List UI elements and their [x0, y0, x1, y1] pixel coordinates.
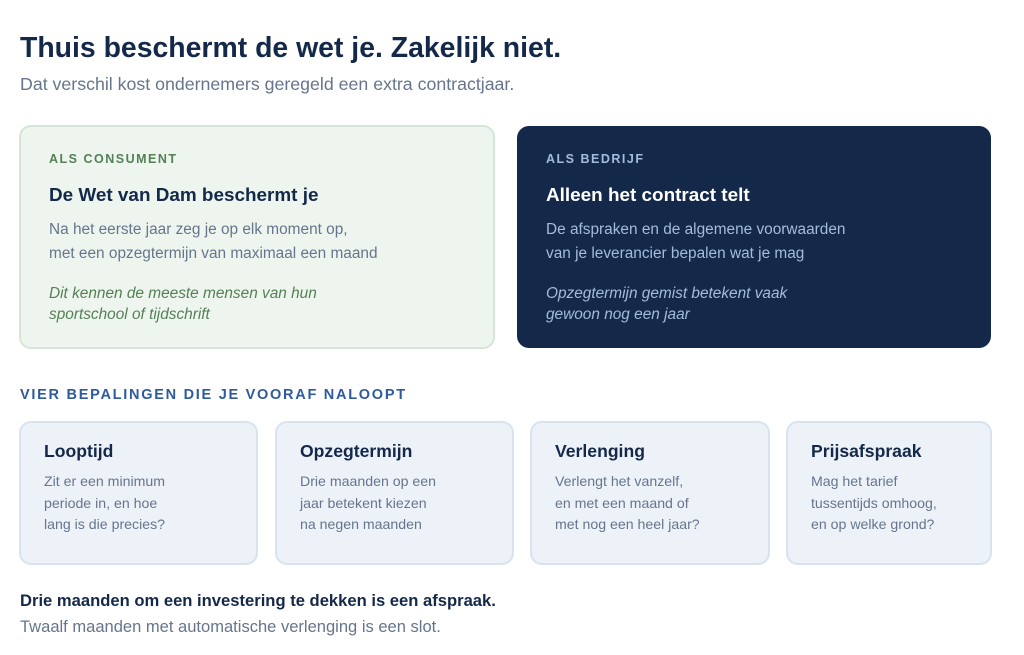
conclusion: regular line: Twaalf maanden met automatische verlenging is een slot.: [20, 617, 441, 636]
text: consumentenregel: met een opzegtermijn van maximaal een maand: [49, 245, 378, 262]
panel: als bedrijf: [517, 126, 991, 348]
card text: [44, 473, 165, 532]
panel: als consument: [19, 125, 495, 349]
card text: Drie maanden op een: [300, 473, 436, 489]
card text: jaar betekent kiezen: [300, 494, 427, 510]
text: consumentenregel: [49, 221, 378, 262]
card text: en op welke grond?: [811, 516, 934, 532]
card text: periode in, en hoe: [44, 494, 157, 510]
note: sportschool: sportschool of tijdschrift: [49, 306, 210, 323]
card: verlenging: [530, 421, 770, 565]
card heading: Looptijd: [44, 441, 113, 461]
note: sportschool: Dit kennen de meeste mensen van hun: [49, 285, 317, 302]
heading: alleen het contract: Alleen het contract telt: [546, 185, 750, 206]
label: als bedrijf: ALS BEDRIJF: [546, 152, 644, 166]
card text: [811, 473, 937, 532]
note: opzegtermijn gemist: [546, 285, 788, 323]
card: looptijd: [19, 421, 258, 565]
heading: de wet van dam: De Wet van Dam beschermt je: [49, 185, 318, 206]
card text: met nog een heel jaar?: [555, 516, 700, 532]
text: bedrijfsregel: van je leverancier bepalen wat je mag: [546, 245, 804, 262]
subtitle: Dat verschil kost ondernemers geregeld een extra contractjaar.: [20, 74, 514, 94]
card: opzegtermijn: [275, 421, 514, 565]
card text: tussentijds omhoog,: [811, 494, 937, 510]
card text: lang is die precies?: [44, 516, 165, 532]
card text: [555, 473, 700, 532]
card text: Zit er een minimum: [44, 473, 165, 489]
card heading: Verlenging: [555, 441, 645, 461]
note: sportschool: [49, 285, 317, 323]
section heading: VIER BEPALINGEN DIE JE VOORAF NALOOPT: [20, 387, 407, 403]
card heading: Opzegtermijn: [300, 441, 412, 461]
card text: en met een maand of: [555, 494, 689, 510]
text: bedrijfsregel: De afspraken en de algemene voorwaarden: [546, 221, 845, 238]
card text: Verlengt het vanzelf,: [555, 473, 683, 489]
text: bedrijfsregel: [546, 221, 845, 262]
title: Thuis beschermt de wet je. Zakelijk niet.: [20, 32, 561, 64]
text: consumentenregel: Na het eerste jaar zeg je op elk moment op,: [49, 221, 348, 238]
card: prijsafspraak: [786, 421, 992, 565]
note: opzegtermijn gemist: Opzegtermijn gemist betekent vaak: [546, 285, 787, 302]
card text: na negen maanden: [300, 516, 422, 532]
card heading: Prijsafspraak: [811, 441, 922, 461]
card text: [300, 473, 436, 532]
note: opzegtermijn gemist: gewoon nog een jaar: [546, 306, 690, 323]
card text: Mag het tarief: [811, 473, 897, 489]
conclusion: bold line: Drie maanden om een investering te dekken is een afspraak.: [20, 591, 496, 610]
label: als consument: ALS CONSUMENT: [49, 152, 178, 166]
